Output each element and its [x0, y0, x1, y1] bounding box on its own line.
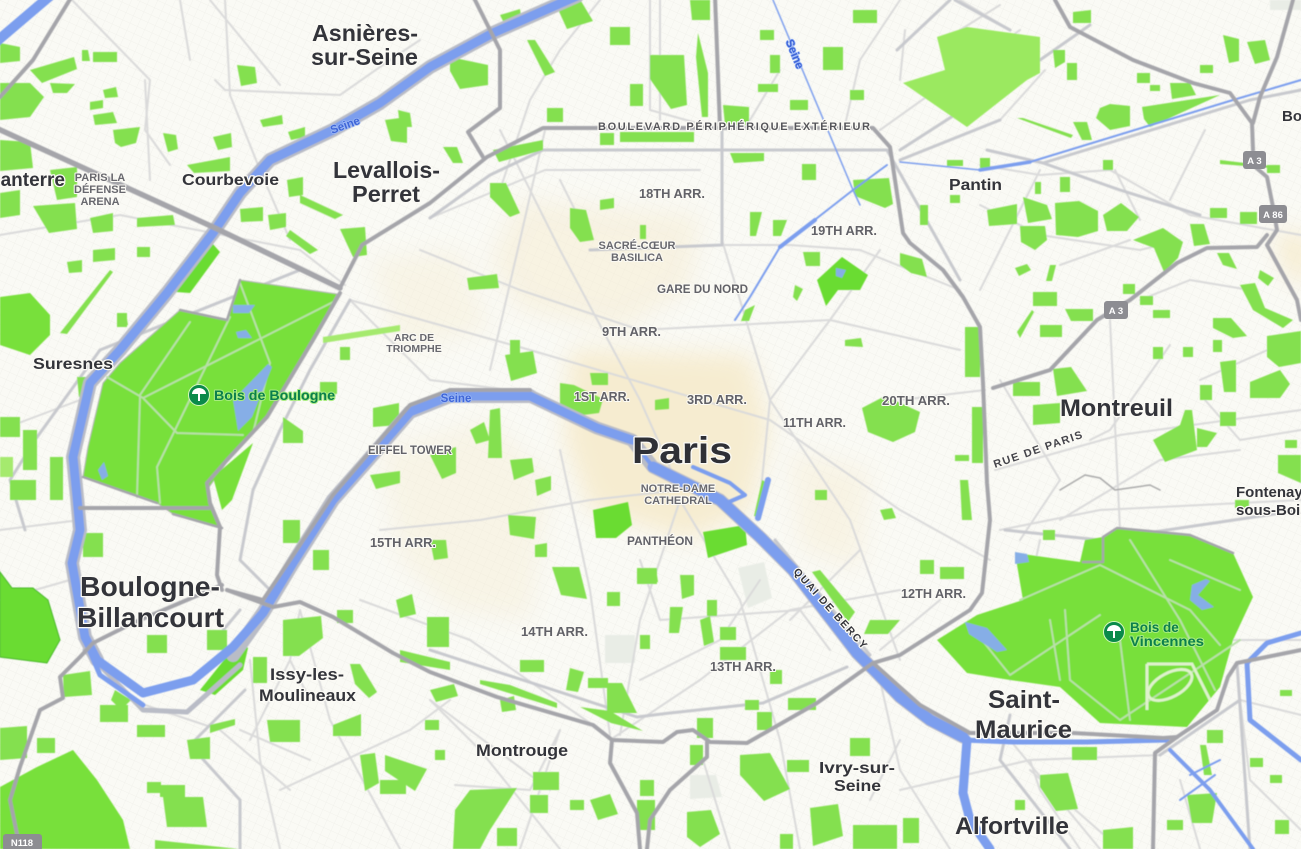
label: Levallois-Perret: Perret — [352, 181, 420, 207]
park: Bois de Boulogne — [83, 280, 337, 528]
label: Notre-Dame Cathedral: NOTRE-DAME — [641, 483, 715, 495]
label: Ivry-sur-Seine: Seine — [834, 778, 881, 795]
park: western park — [0, 572, 60, 663]
label: Paris La Défense Arena: PARIS LA — [75, 172, 125, 184]
label: Bois de Boulogne: Bois de Boulogne — [214, 388, 336, 403]
label: Montrouge: Montrouge — [476, 741, 568, 760]
label: Asnières-sur-Seine: sur-Seine — [311, 44, 418, 70]
label: 14th arrondissement: 14TH ARR. — [521, 624, 588, 639]
shield: A3 east — [1104, 301, 1128, 319]
label: 3rd arrondissement: 3RD ARR. — [687, 392, 747, 407]
label: 18th arrondissement: 18TH ARR. — [639, 186, 705, 201]
label: Alfortville: Alfortville — [955, 813, 1069, 840]
label: Issy-les-Moulineaux: Moulineaux — [259, 687, 357, 705]
label: 15th arrondissement: 15TH ARR. — [370, 535, 436, 550]
parks: central and south — [370, 408, 964, 849]
label: Paris: Paris — [632, 430, 732, 471]
label: Gare du Nord: GARE DU NORD — [657, 284, 748, 296]
shield: N118: N118 — [11, 838, 33, 849]
label: Notre-Dame Cathedral: CATHEDRAL — [644, 495, 712, 507]
park: Nanterre park — [0, 293, 50, 355]
label: Seine canal: Seine — [783, 38, 805, 71]
label: Suresnes: Suresnes — [33, 356, 113, 373]
shield: A3 north: A 3 — [1247, 156, 1262, 167]
parks: east — [900, 10, 1280, 277]
label: Eiffel Tower: EIFFEL TOWER — [368, 445, 453, 457]
horse track in Bois de Vincennes — [1143, 663, 1210, 710]
lakes — [98, 268, 1214, 652]
label: 20th arrondissement: 20TH ARR. — [882, 393, 950, 408]
park: Bois de Vincennes — [937, 528, 1253, 727]
shield: A86: A 86 — [1263, 210, 1283, 221]
label: Bois de Vincennes: Vincennes — [1130, 634, 1204, 649]
shield: A3 north — [1243, 151, 1266, 169]
park: Luxembourg — [593, 502, 632, 538]
icon: Bois de Vincennes tree — [1104, 622, 1124, 642]
icon: Bois de Boulogne tree — [188, 384, 210, 406]
label: 1st arrondissement: 1ST ARR. — [574, 389, 630, 404]
parks: south-west suburbs — [0, 610, 450, 849]
label: Boulogne-Billancourt: Billancourt — [77, 602, 224, 633]
label: Bois de Vincennes: Bois de — [1130, 620, 1179, 635]
label: Seine north: Seine — [329, 115, 362, 137]
label: 12th arrondissement: 12TH ARR. — [901, 586, 966, 601]
label: 9th arrondissement: 9TH ARR. — [602, 324, 661, 339]
label: Seine centre: Seine — [441, 393, 471, 405]
label: Boulogne-Billancourt: Boulogne- — [80, 571, 220, 602]
shield: A86 — [1259, 205, 1287, 223]
label: Levallois-Perret: Levallois- — [333, 157, 440, 183]
shield: N118 — [3, 834, 42, 849]
label: Pantin: Pantin — [949, 177, 1002, 194]
label: Arc de Triomphe: ARC DE — [394, 332, 434, 344]
park: Père Lachaise — [862, 396, 920, 442]
label: Saint-Maurice: Saint- — [988, 686, 1060, 714]
label: Boulevard Périphérique Extérieur: BOULEVARD PÉRIPHÉRIQUE EXTÉRIEUR — [598, 120, 870, 133]
label: Saint-Maurice: Maurice — [975, 716, 1072, 744]
parks: north — [443, 0, 893, 290]
label: 11th arrondissement: 11TH ARR. — [783, 415, 846, 430]
park: Bercy — [703, 525, 747, 558]
park: southwest park — [0, 750, 130, 849]
label: Sacré-Cœur Basilica: SACRÉ-CŒUR — [598, 239, 676, 252]
label: Montreuil: Montreuil — [1060, 395, 1173, 422]
label: Issy-les-Moulineaux: Issy-les- — [270, 666, 344, 684]
park: Parc de la Villette area — [903, 27, 1040, 127]
label: Paris La Défense Arena: DÉFENSE — [74, 183, 126, 196]
label: Courbevoie: Courbevoie — [182, 172, 279, 189]
label: Arc de Triomphe: TRIOMPHE — [386, 343, 442, 355]
label: Asnières-sur-Seine: Asnières- — [312, 20, 418, 46]
label: Ivry-sur-Seine: Ivry-sur- — [819, 760, 895, 777]
label: 13th arrondissement: 13TH ARR. — [710, 659, 776, 674]
label: Sacré-Cœur Basilica: BASILICA — [611, 252, 663, 264]
park: Buttes-Chaumont — [817, 257, 868, 306]
dense-centre beige areas — [370, 200, 1301, 620]
park: Seine islands — [176, 243, 248, 695]
shield: A3 east: A 3 — [1109, 306, 1123, 317]
label: Quai de Bercy: QUAI DE BERCY — [791, 566, 869, 651]
highway casings along the Seine — [72, 0, 963, 737]
pale institutional patches — [605, 0, 1301, 799]
Bois de Boulogne strip — [213, 443, 253, 510]
label: Panthéon: PANTHÉON — [627, 535, 693, 548]
label: Rue de Paris: RUE DE PARIS — [992, 429, 1084, 471]
park paths — [107, 283, 1240, 720]
label: 19th arrondissement: 19TH ARR. — [811, 223, 877, 238]
label: Paris La Défense Arena: ARENA — [80, 196, 120, 208]
parks: west suburbs — [0, 43, 412, 327]
